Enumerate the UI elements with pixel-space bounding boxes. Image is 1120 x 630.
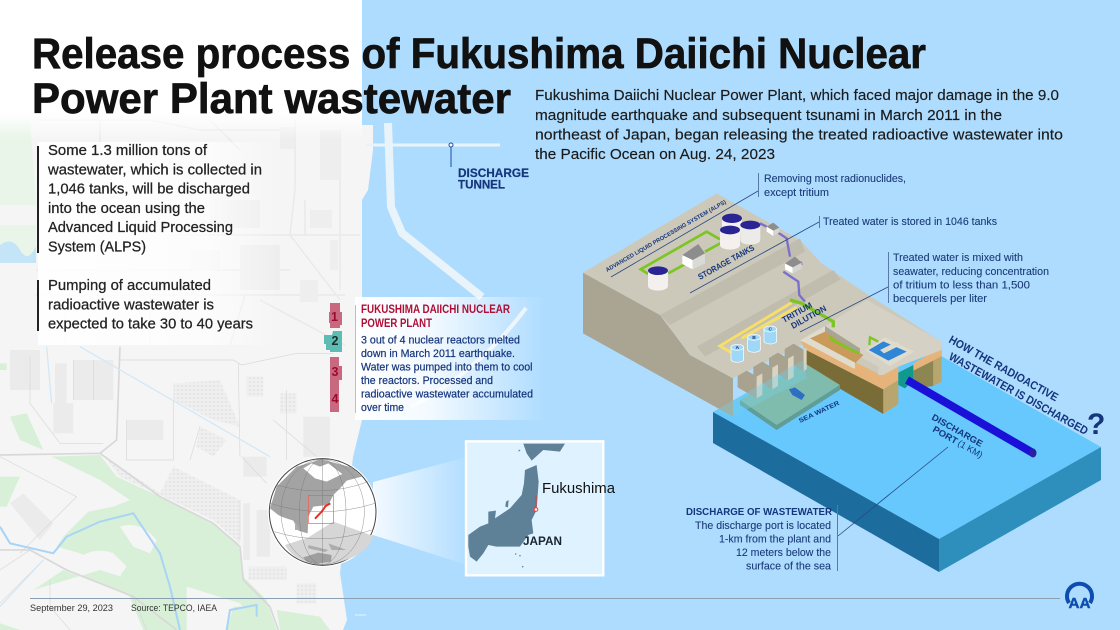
icon: AA logo (1067, 584, 1092, 612)
ALPS equipment: tanks, pipes, buildings (641, 214, 805, 302)
heading: how the radioactive wastewater is discharged: ? (1087, 408, 1105, 441)
intro paragraph: Fukushima Daiichi Nuclear Power Plant, which faced major damage in the 9.0 (535, 88, 1059, 104)
text panel: key facts: wastewater, which is collected in (47, 162, 262, 178)
intro paragraph: the Pacific Ocean on Aug. 24, 2023 (535, 147, 775, 163)
title: Release process of Fukushima Daiichi Nuclear (32, 30, 926, 78)
green pipes (641, 232, 723, 275)
text panel: key facts: Pumping of accumulated (48, 278, 211, 294)
text panel: key facts (37, 142, 278, 345)
sea block (713, 319, 1101, 572)
callout: dilution: seawater, reducing concentration (893, 266, 1049, 278)
reactors 1 to 4: 1 (331, 310, 338, 324)
title: Power Plant wastewater (32, 75, 511, 123)
tritium dilution pipes and tanks (720, 300, 833, 362)
callout: dilution (888, 252, 1049, 305)
callout: tanks: Treated water is stored in 1046 tanks (823, 216, 997, 228)
isometric labels: ADVANCED LIQUID PROCESSING SYSTEM (ALPS) (605, 200, 728, 274)
beam from globe to inset map (373, 457, 467, 565)
heading: how the radioactive wastewater is discharged: WASTEWATER IS DISCHARGED (947, 351, 1090, 438)
footer rule and source (30, 598, 1060, 614)
isometric labels: STORAGE TANKS (696, 242, 756, 282)
callout: discharge of wastewater: surface of the sea (746, 560, 832, 572)
heading: how the radioactive wastewater is discharged: HOW THE RADIOACTIVE (947, 334, 1060, 404)
callout: discharge of wastewater: 1-km from the plant and (719, 534, 831, 546)
isometric labels: DISCHARGE (930, 412, 985, 449)
small pump houses (767, 223, 802, 273)
text panel: key facts: expected to take 30 to 40 years (48, 316, 253, 332)
panel: Fukushima Daiichi plant: Water was pumped into them to cool (361, 362, 532, 374)
isometric labels (605, 200, 985, 460)
leader lines (611, 191, 948, 536)
icon: AA logo: AA (1068, 595, 1091, 612)
callout: discharge of wastewater: The discharge port is located (695, 520, 831, 532)
callout: removing radionuclides: Removing most radionuclides, (764, 173, 906, 185)
building (682, 244, 705, 269)
tritium dilution pipes and tanks: A (736, 345, 740, 351)
text panel: key facts: Some 1.3 million tons of (48, 143, 208, 159)
purple pipes (760, 223, 805, 302)
discharge pipe (907, 380, 1036, 458)
panel: Fukushima Daiichi plant: over time (361, 402, 404, 414)
map: lower area with green zones, rivers and tank fields (0, 347, 333, 630)
callout: dilution: of tritium to less than 1,500 (893, 280, 1030, 292)
panel: Fukushima Daiichi plant: down in March 2011 earthquake. (361, 348, 515, 360)
breakwater and port (346, 123, 526, 615)
callout: discharge of wastewater: DISCHARGE OF WASTEWATER (686, 506, 832, 518)
inset labels: JAPAN (523, 536, 562, 548)
callout: discharge of wastewater (686, 505, 838, 572)
intro paragraph (535, 88, 1063, 163)
reactors 1 to 4: 3 (332, 365, 339, 379)
inset map: Japan (466, 441, 603, 575)
isometric labels: PORT (931, 424, 960, 446)
callout: dilution: Treated water is mixed with (893, 252, 1023, 264)
basin structure (800, 300, 942, 414)
callout: discharge tunnel: DISCHARGE (458, 168, 529, 180)
text panel: key facts: 1,046 tanks, will be discharged (48, 182, 250, 198)
isometric labels: SEA WATER (798, 400, 841, 425)
tritium dilution pipes and tanks: B (752, 335, 756, 341)
callout: dilution: becquerels per liter (893, 293, 987, 305)
inset labels: Fukushima (542, 481, 616, 497)
text panel: key facts: Advanced Liquid Processing (48, 220, 233, 236)
map: land with roads and facilities (0, 0, 373, 630)
callout: discharge tunnel (449, 143, 529, 192)
title (32, 30, 926, 123)
panel: Fukushima Daiichi plant: radioactive wastewater accumulated (361, 388, 533, 400)
globe locator (268, 457, 378, 567)
text panel: key facts: System (ALPS) (48, 240, 146, 256)
panel: Fukushima Daiichi plant: FUKUSHIMA DAIICHI NUCLEAR (361, 304, 511, 316)
reactors 1 to 4: 2 (332, 334, 339, 348)
white fade behind title (0, 0, 362, 140)
panel: Fukushima Daiichi plant (355, 297, 545, 420)
isometric labels: (1 KM) (956, 438, 984, 460)
footer rule and source: September 29, 2023 (30, 603, 113, 614)
inset labels (523, 481, 616, 548)
text panel: key facts: into the ocean using the (48, 201, 205, 217)
panel: Fukushima Daiichi plant: POWER PLANT (361, 318, 432, 330)
reactors 1 to 4 (324, 303, 342, 412)
isometric labels: TRITIUM (780, 300, 814, 325)
callout: removing radionuclides (758, 173, 906, 199)
intro paragraph: magnitude earthquake and subsequent tsunami in March 2011 in the (535, 108, 1002, 124)
tritium dilution pipes and tanks: C (769, 327, 773, 333)
footer rule and source: Source: TEPCO, IAEA (131, 603, 218, 614)
storage tanks (648, 214, 760, 291)
callout: discharge tunnel: TUNNEL (458, 180, 505, 192)
callout: discharge of wastewater: 12 meters below the (736, 547, 831, 559)
intro paragraph: northeast of Japan, began releasing the treated radioactive wastewater into (535, 128, 1063, 144)
reactors 1 to 4: 4 (332, 392, 339, 406)
sea water intake (713, 344, 840, 430)
callout: removing radionuclides: except tritium (764, 187, 829, 199)
panel: Fukushima Daiichi plant: the reactors. Processed and (361, 375, 493, 387)
panel: Fukushima Daiichi plant: 3 out of 4 nuclear reactors melted (361, 334, 520, 346)
isometric labels: DILUTION (789, 303, 828, 331)
text panel: key facts: radioactive wastewater is (48, 297, 214, 313)
land platform (583, 193, 942, 417)
